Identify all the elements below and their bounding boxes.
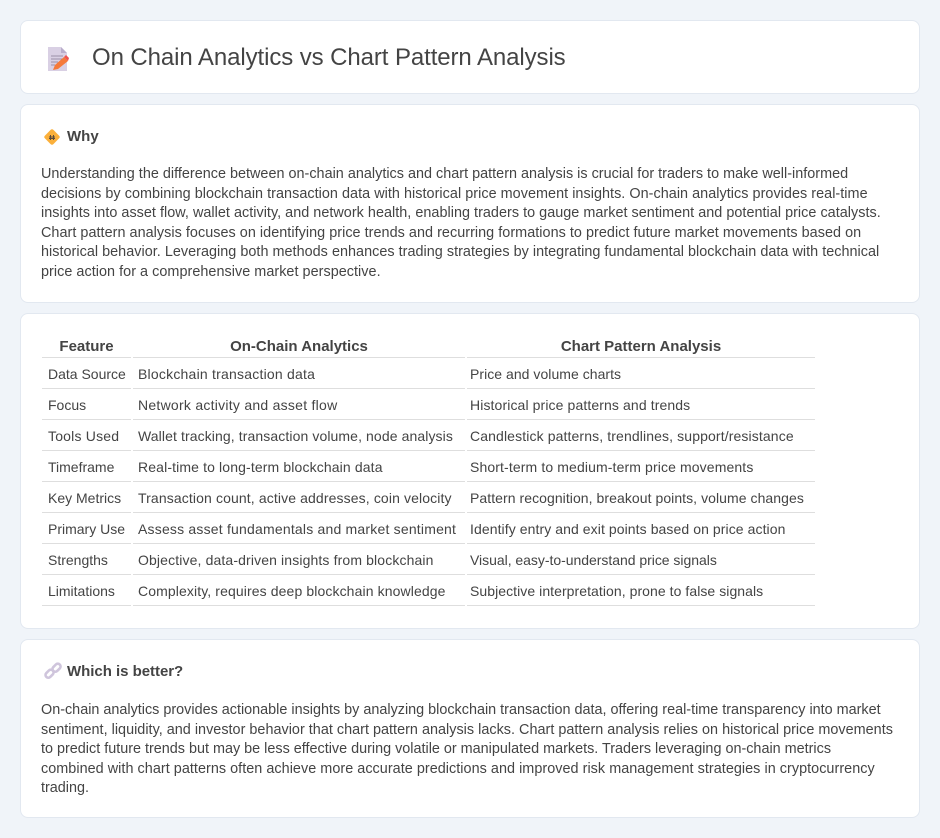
row: strengths bbox=[48, 552, 717, 568]
row: primary use bbox=[48, 521, 785, 537]
row: tools used: Candlestick patterns, trendlines, support/resistance bbox=[470, 428, 794, 444]
why paragraph: historical behavior. Leveraging both methods enhances trading strategies by integrating fundamental blockchain data with technical bbox=[41, 244, 879, 260]
row: primary use: Identify entry and exit points based on price action bbox=[470, 521, 785, 537]
row: key metrics: Transaction count, active addresses, coin velocity bbox=[138, 490, 452, 506]
which is better paragraph: to predict future trends but may be less effective during volatile or manipulated markets. Traders leveraging on-chain metrics bbox=[41, 741, 831, 757]
row: data source: Price and volume charts bbox=[470, 366, 621, 382]
why paragraph: insights into asset flow, wallet activity, and network health, enabling traders to gauge market sentiment and potential price catalysts. bbox=[41, 205, 881, 221]
table header: Feature bbox=[59, 338, 114, 355]
heading: why: Why bbox=[67, 128, 99, 145]
which is better paragraph: sentiment, liquidity, and investor behavior that chart pattern analysis lacks. Chart pattern analysis relies on historical price movements bbox=[41, 722, 893, 738]
row: timeframe: Short-term to medium-term price movements bbox=[470, 459, 753, 475]
panel: why bbox=[20, 104, 920, 303]
row: primary use: Assess asset fundamentals and market sentiment bbox=[138, 521, 456, 537]
panel: comparison table bbox=[20, 313, 920, 629]
why paragraph: Chart pattern analysis focuses on identifying price trends and recurring formations to predict future market movements based on bbox=[41, 225, 861, 241]
row: tools used: Tools Used bbox=[48, 428, 119, 444]
row: strengths: Visual, easy-to-understand price signals bbox=[470, 552, 717, 568]
row: limitations: Limitations bbox=[48, 583, 115, 599]
row: focus bbox=[48, 397, 690, 413]
table header: On-Chain Analytics bbox=[230, 338, 368, 355]
icon: document with pencil bbox=[48, 47, 69, 71]
heading: which is better: Which is better? bbox=[67, 663, 183, 680]
why paragraph bbox=[41, 166, 881, 280]
row: data source: Blockchain transaction data bbox=[138, 366, 315, 382]
row: strengths: Strengths bbox=[48, 552, 108, 568]
row: key metrics: Key Metrics bbox=[48, 490, 121, 506]
row: focus: Focus bbox=[48, 397, 86, 413]
row: limitations bbox=[48, 583, 763, 599]
row: timeframe: Timeframe bbox=[48, 459, 114, 475]
row: focus: Historical price patterns and trends bbox=[470, 397, 690, 413]
why paragraph: price action for a comprehensive market perspective. bbox=[41, 264, 381, 280]
row: key metrics bbox=[48, 490, 804, 506]
row: key metrics: Pattern recognition, breakout points, volume changes bbox=[470, 490, 804, 506]
row: strengths: Objective, data-driven insights from blockchain bbox=[138, 552, 434, 568]
why paragraph: Understanding the difference between on-chain analytics and chart pattern analysis is crucial for traders to make well-informed bbox=[41, 166, 848, 182]
row: data source: Data Source bbox=[48, 366, 126, 382]
row: tools used: Wallet tracking, transaction volume, node analysis bbox=[138, 428, 453, 444]
row: limitations: Subjective interpretation, prone to false signals bbox=[470, 583, 763, 599]
row: focus: Network activity and asset flow bbox=[138, 397, 337, 413]
icon: warning diamond bbox=[44, 129, 60, 145]
row: tools used bbox=[48, 428, 794, 444]
title text: On Chain Analytics vs Chart Pattern Analysis bbox=[92, 44, 566, 71]
which is better paragraph: combined with chart patterns often achieve more accurate predictions and improved risk management strategies in cryptocurrency bbox=[41, 761, 875, 777]
row: primary use: Primary Use bbox=[48, 521, 125, 537]
row: timeframe: Real-time to long-term blockchain data bbox=[138, 459, 383, 475]
table header bbox=[59, 338, 721, 355]
which is better paragraph: On-chain analytics provides actionable insights by analyzing blockchain transaction data, offering real-time transparency into market bbox=[41, 702, 881, 718]
which is better paragraph: trading. bbox=[41, 780, 89, 796]
why paragraph: decisions by combining blockchain transaction data with historical price movement insights. On-chain analytics provides real-time bbox=[41, 186, 868, 202]
table header: Chart Pattern Analysis bbox=[561, 338, 721, 355]
panel: title bbox=[20, 20, 920, 94]
row: timeframe bbox=[48, 459, 753, 475]
which is better paragraph bbox=[41, 702, 893, 796]
panel: which is better bbox=[20, 639, 920, 818]
icon: link bbox=[44, 662, 62, 679]
row: limitations: Complexity, requires deep blockchain knowledge bbox=[138, 583, 446, 599]
row: data source bbox=[48, 366, 621, 382]
